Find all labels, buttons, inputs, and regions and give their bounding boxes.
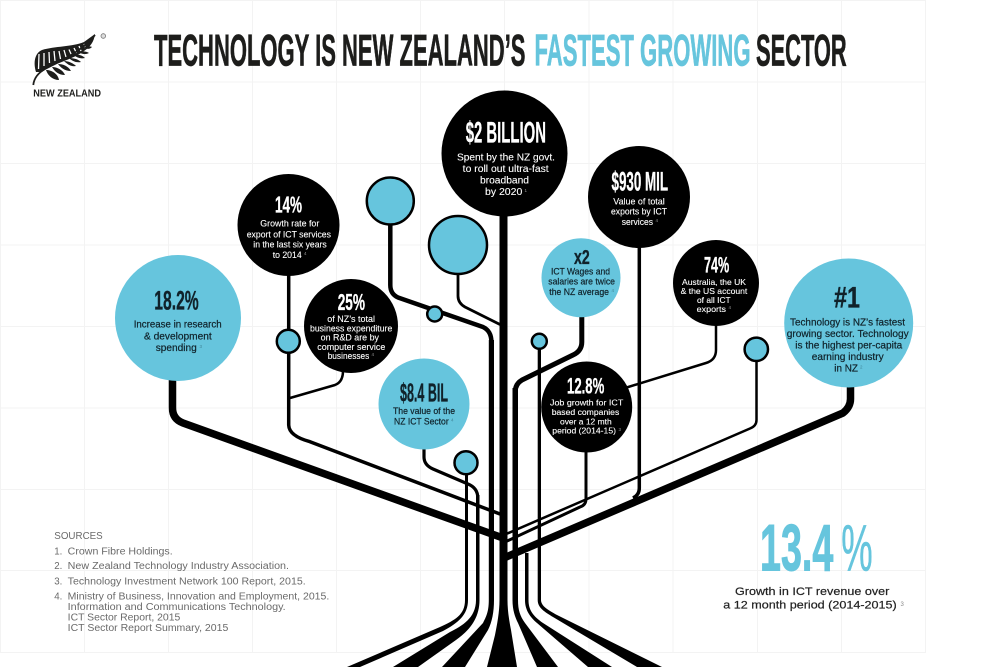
- panel: 74%: of all ICT: [697, 295, 731, 305]
- callout: 13.4% revenue growth: a 12 month period (2014-2015): [723, 600, 897, 612]
- panel: $2 billion: by 2020: [485, 187, 523, 198]
- text block: sources: ICT Sector Report, 2015: [68, 613, 180, 624]
- text block: sources: Information and Communications Technology.: [68, 602, 286, 613]
- text block: sources: Crown Fibre Holdings.: [68, 546, 173, 557]
- panel: 18.2%: [115, 255, 241, 381]
- panel: $2 billion: [442, 90, 568, 216]
- panel: #1: is the highest per-capita: [795, 341, 903, 352]
- ring node: centre small: [532, 334, 547, 349]
- branch: 74% exports: [625, 325, 716, 388]
- text block: sources: Technology Investment Network 100 Report, 2015.: [68, 576, 306, 587]
- callout: 13.4% revenue growth: 3: [900, 602, 904, 608]
- panel: 12.8%: period (2014-15): [552, 426, 616, 436]
- panel: #1: earning industry: [812, 352, 885, 363]
- panel: #1: #1: [834, 282, 860, 315]
- panel: $8.4 bil: The value of the: [393, 406, 455, 416]
- panel: 12.8%: 3: [618, 427, 622, 432]
- text: SECTOR: [756, 26, 847, 76]
- panel: $930 mil: Value of total: [613, 196, 665, 206]
- panel: $2 billion: Spent by the NZ govt.: [457, 152, 555, 163]
- callout: 13.4% revenue growth: %: [841, 511, 873, 585]
- panel: $930 mil: [588, 146, 690, 248]
- panel: $2 billion: 1: [524, 188, 528, 193]
- panel: 18.2%: Increase in research: [134, 320, 222, 331]
- panel: #1: growing sector. Technology: [787, 329, 910, 340]
- text block: sources: 4.: [54, 591, 62, 602]
- logo wordmark: NEW ZEALAND: [33, 89, 101, 100]
- panel: $8.4 bil: 4: [451, 418, 454, 422]
- branch: 25% R&D expenditure: [290, 371, 343, 398]
- icon: silver fern: [33, 34, 95, 85]
- ring node: right: [745, 338, 768, 361]
- panel: 14%: export of ICT services: [247, 229, 331, 239]
- panel: 74%: exports: [697, 304, 726, 314]
- panel: 12.8%: [541, 362, 632, 452]
- panel: $2 billion: to roll out ultra-fast: [463, 164, 549, 175]
- panel: 74%: Australia, the UK: [682, 277, 746, 287]
- panel: 12.8%: 12.8%: [567, 373, 604, 398]
- panel: 14%: 14%: [275, 192, 302, 218]
- branch: #1 fastest sector: [505, 386, 850, 558]
- panel: 14%: [238, 174, 340, 276]
- panel: $8.4 bil: $8.4 BIL: [400, 380, 448, 408]
- title: FASTEST GROWING: [534, 26, 750, 76]
- panel: 74%: 74%: [704, 252, 729, 277]
- branch: 12.8% job growth: [505, 452, 586, 542]
- panel: #1: Technology is NZ’s fastest: [790, 317, 905, 328]
- tree of connecting lines: [172, 216, 850, 667]
- branch: right ring: [505, 361, 756, 534]
- panel: 12.8%: based companies: [552, 407, 620, 417]
- panel: 18.2%: 18.2%: [154, 285, 199, 315]
- panel: 18.2%: 3: [200, 344, 202, 349]
- text block: sources: [54, 531, 329, 634]
- panel: 14%: to 2014: [273, 250, 302, 260]
- panel: 74%: 4: [728, 305, 732, 310]
- panel: 25%: businesses: [328, 351, 370, 361]
- panel: 14%: Growth rate for: [260, 219, 319, 229]
- panel: #1: in NZ: [834, 364, 858, 375]
- panel: $930 mil: exports by ICT: [611, 207, 667, 217]
- panel: $930 mil: 4: [656, 218, 658, 223]
- panel: x2 wages: x2: [574, 246, 590, 269]
- branch: large ring: [458, 274, 500, 324]
- text block: sources: 1.: [54, 546, 62, 557]
- registered mark: [101, 34, 106, 38]
- panel: 25%: 25%: [338, 289, 365, 315]
- panel: 25%: of NZ’s total: [327, 314, 375, 324]
- panel: x2 wages: salaries are twice: [548, 277, 615, 287]
- panel: 74%: [673, 240, 759, 326]
- text block: sources: Ministry of Business, Innovation and Employment, 2015.: [68, 591, 329, 602]
- branch: 18.2% research spending: [172, 380, 503, 538]
- panel: 25%: 4: [372, 352, 374, 357]
- ring node: lower centre: [454, 451, 478, 474]
- branch: 14% ICT services growth: [289, 275, 500, 514]
- panel: x2 wages: [542, 238, 620, 317]
- panel: $2 billion: $2 BILLION: [466, 117, 546, 150]
- branch: x2 wages: [515, 316, 582, 400]
- text block: sources: ICT Sector Report Summary, 2015: [68, 623, 228, 634]
- ring node: upper left: [367, 178, 414, 224]
- panel: #1: 2: [860, 364, 863, 370]
- panel: 25%: computer service: [317, 342, 385, 352]
- panel: 14%: in the last six years: [253, 240, 327, 250]
- callout: 13.4% revenue growth: Growth in ICT revenue over: [735, 586, 890, 598]
- panel: 25%: [304, 279, 398, 373]
- branch: upper-left ring: [390, 225, 491, 350]
- panel: $2 billion: broadband: [480, 176, 529, 187]
- panel: 14%: 4: [304, 251, 307, 256]
- panel: x2 wages: ICT Wages and: [551, 266, 610, 276]
- trunk flare: base stripes: [347, 216, 662, 667]
- callout: 13.4% revenue growth: [723, 511, 904, 612]
- text block: sources: 3.: [54, 576, 62, 587]
- panel: #1: [784, 258, 913, 388]
- panel: $8.4 bil: NZ ICT Sector: [394, 417, 449, 427]
- text block: sources: SOURCES: [54, 531, 103, 542]
- panel: 12.8%: over a 12 mth: [560, 416, 612, 426]
- panel: $930 mil: $930 MIL: [612, 166, 668, 196]
- branch: $8.4 bil sector value: [424, 448, 478, 505]
- panel: 12.8%: Job growth for ICT: [550, 398, 624, 408]
- panel: 25%: business expenditure: [310, 323, 392, 333]
- panel: $8.4 bil: [378, 358, 470, 450]
- panel: 74%: & the US account: [681, 286, 748, 296]
- ring node: small on branch: [427, 306, 442, 322]
- panel: 18.2%: spending: [156, 343, 197, 354]
- title: TECHNOLOGY IS NEW ZEALAND’S: [154, 26, 526, 76]
- branch: $930 mil exports: [633, 247, 639, 498]
- panel: $930 mil: services: [622, 217, 653, 227]
- ring node: large: [429, 216, 487, 274]
- panel: 25%: on R&D are by: [321, 333, 380, 343]
- callout: 13.4% revenue growth: 13.4: [760, 511, 833, 585]
- ring node: on 14% branch: [277, 330, 300, 353]
- logo: silver fern New Zealand: [33, 34, 106, 100]
- panel: x2 wages: the NZ average: [549, 287, 609, 297]
- panel: 18.2%: & development: [144, 331, 212, 342]
- text block: sources: New Zealand Technology Industry Association.: [68, 561, 289, 572]
- text block: sources: 2.: [54, 561, 62, 572]
- panel: x2 wages: 4: [612, 288, 614, 293]
